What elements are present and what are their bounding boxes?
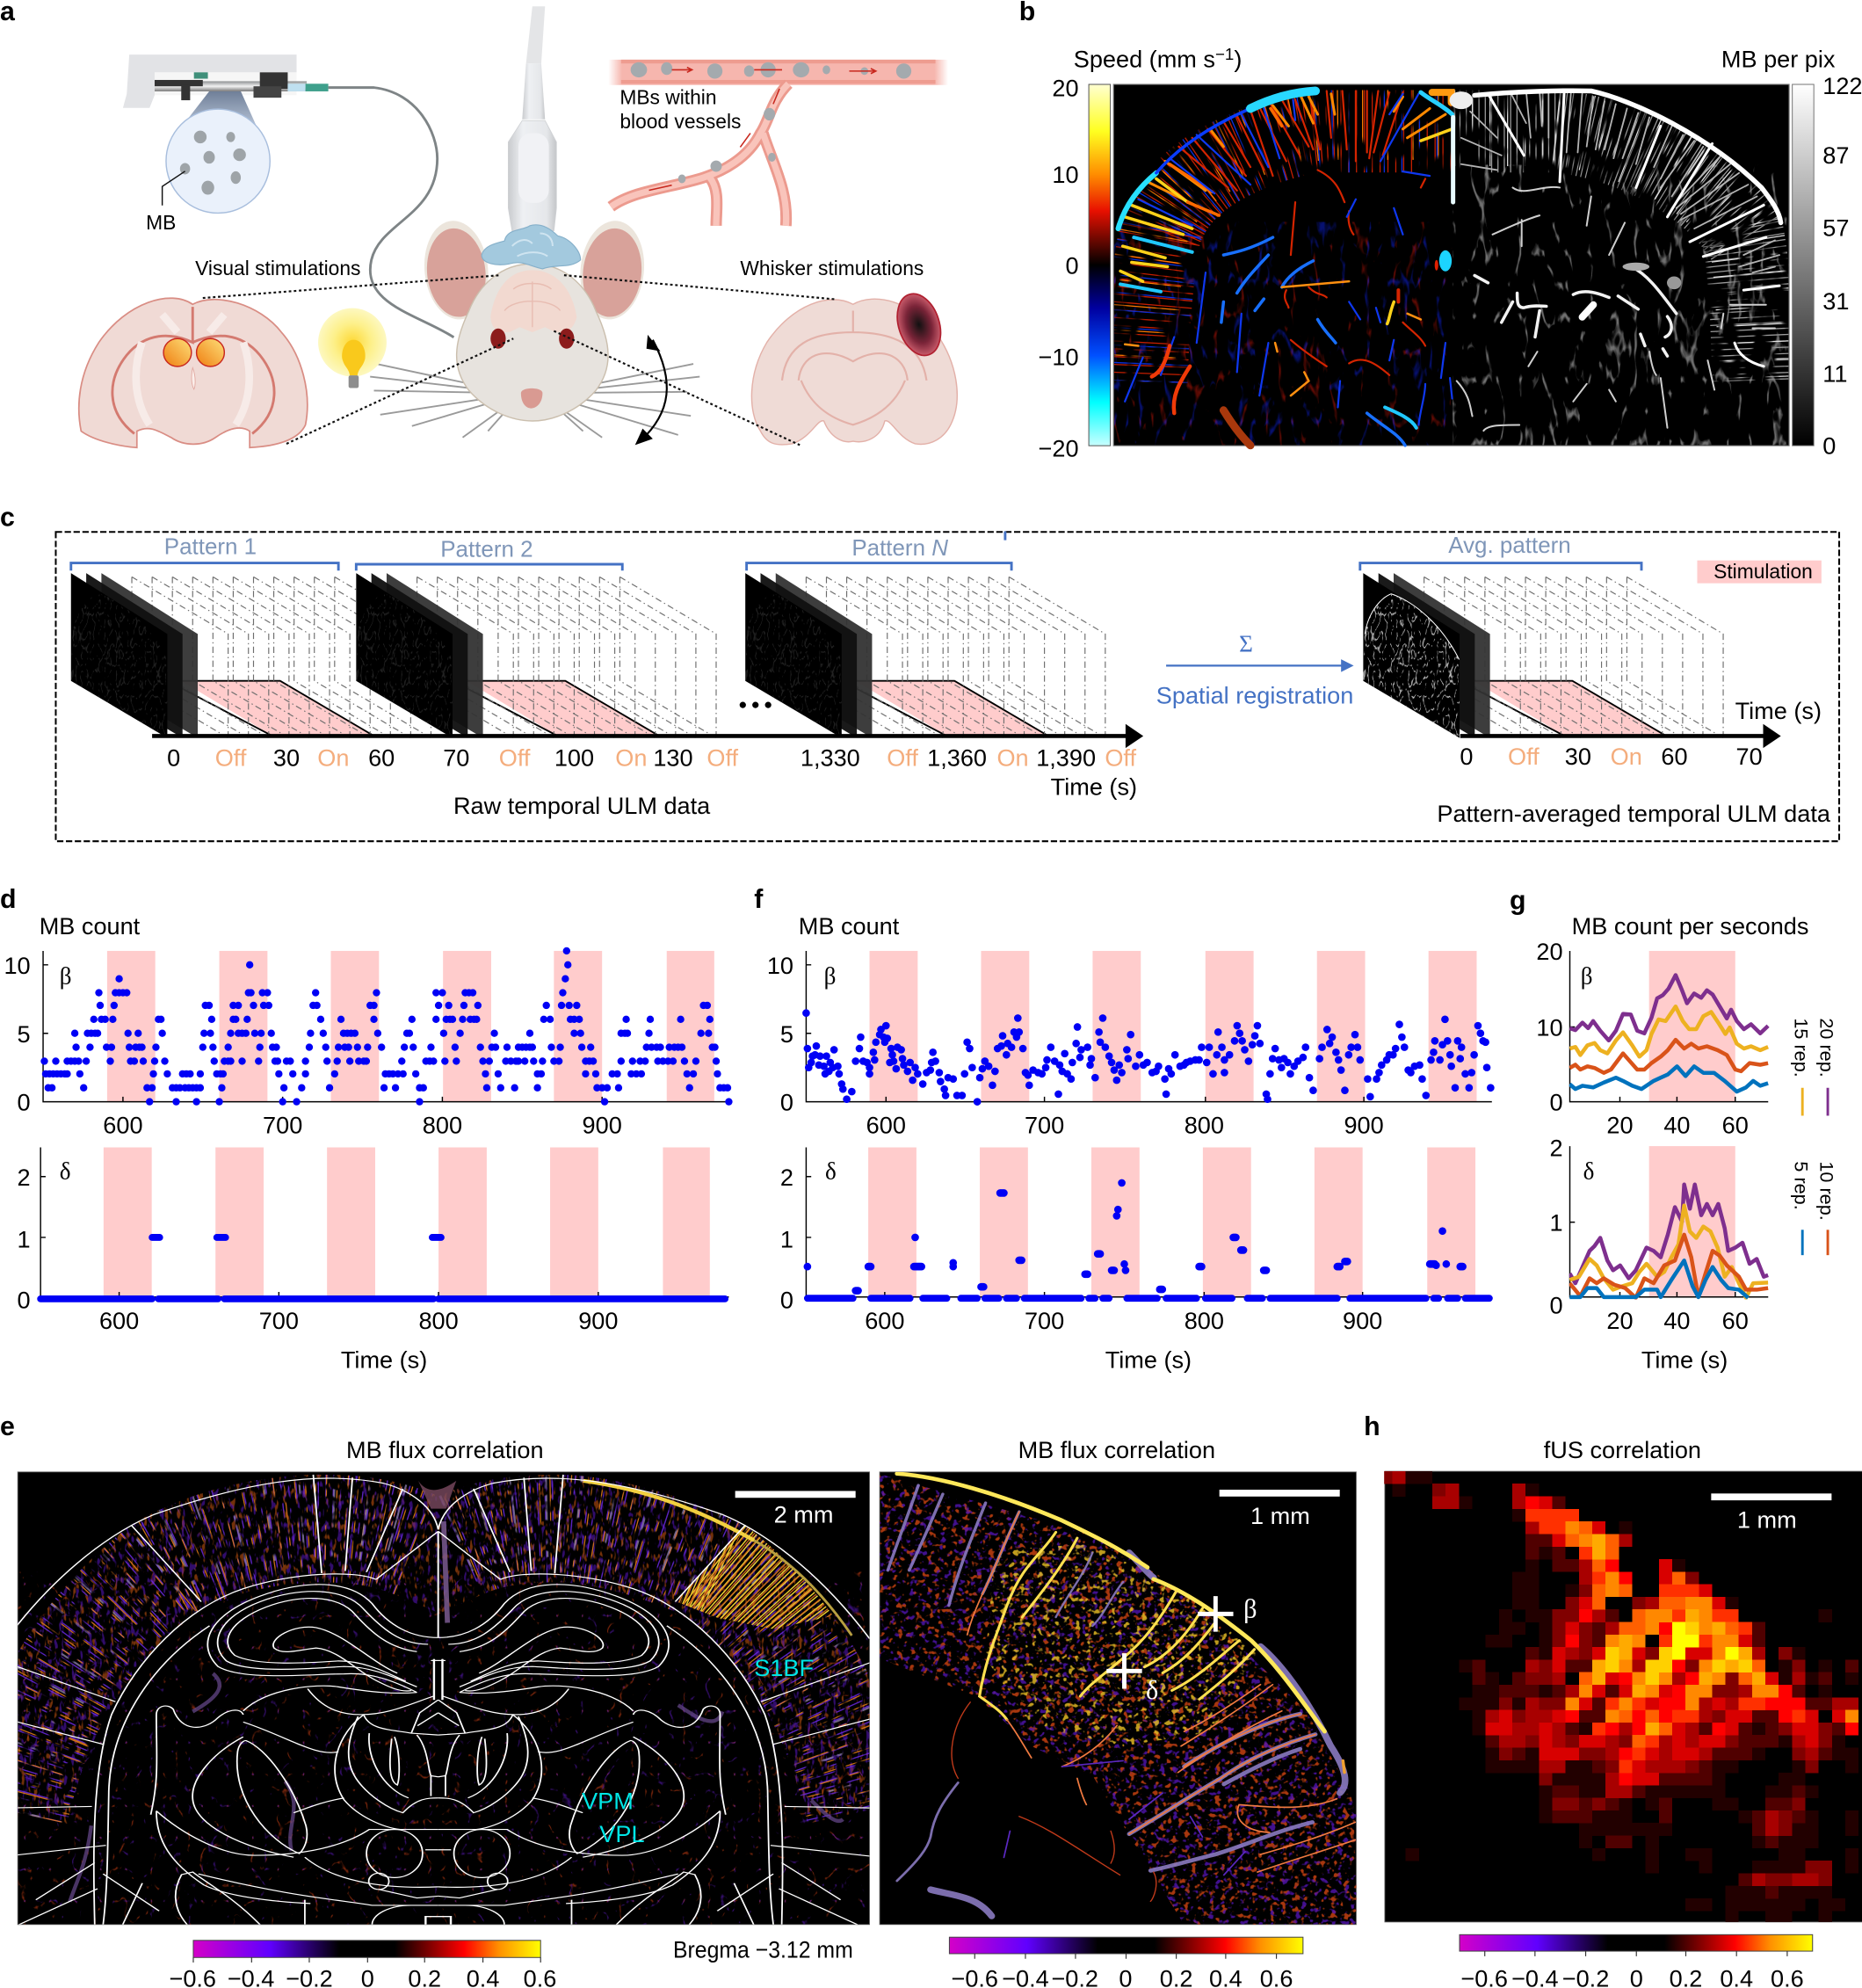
whole-brain correlation map with atlas [0, 1472, 913, 1925]
panel b: velocity and density map [1019, 0, 1862, 461]
legend: stimulation: Stimulation [1713, 560, 1813, 583]
left half: dense cortical fibres [1114, 90, 1452, 383]
pattern labels: Pattern N [851, 534, 948, 561]
plot delta: δ [60, 1158, 71, 1185]
panel letter c: c [0, 504, 15, 533]
raw axis labels: Off [887, 744, 918, 771]
plot beta: 40 [1663, 1112, 1690, 1139]
plot beta [4, 951, 728, 1139]
left: deep red and orange vessels [1152, 345, 1190, 413]
title: fUS correlation [1544, 1436, 1701, 1463]
raw axis labels: On [317, 744, 349, 771]
sum arrow [1156, 631, 1354, 709]
heading: MB count per seconds [1572, 912, 1808, 940]
plot delta: 900 [1343, 1307, 1382, 1334]
averaged axis labels: Off [1508, 743, 1540, 770]
plot beta: 900 [1344, 1112, 1384, 1139]
panel letter f: f [754, 885, 764, 914]
legend repetitions: 5 rep. [1791, 1161, 1813, 1210]
raw axis labels: 60 [368, 744, 395, 771]
plot delta: 2 [18, 1164, 31, 1191]
plot delta: 20 [1606, 1307, 1634, 1334]
panel letter g: g [1510, 886, 1525, 915]
plot beta: β [824, 962, 836, 989]
panel c: averaging workflow [0, 504, 1839, 841]
raw axis labels: Off [499, 744, 531, 771]
plot delta: 1 [780, 1225, 793, 1252]
plot beta: 0 [780, 1089, 793, 1116]
pattern labels [164, 532, 1571, 562]
legend repetitions: 15 rep. [1791, 1018, 1813, 1077]
speed colour bar: 20 [1052, 75, 1079, 102]
averaged axis labels: 60 [1661, 743, 1688, 770]
raw axis labels: Off [215, 744, 247, 771]
region labels: S1BF [754, 1654, 814, 1681]
purple-grey large vessels [888, 1485, 1345, 1916]
x axis label: Time (s) [1641, 1346, 1728, 1374]
left: red cortical fibres [1178, 91, 1425, 375]
legend repetitions: 20 rep. [1815, 1018, 1837, 1077]
region labels: VPM [582, 1788, 634, 1815]
bright radial vessels [980, 1532, 1255, 1720]
blood vessels with microbubbles: blood vessels [619, 110, 741, 133]
plot beta: 800 [1185, 1112, 1224, 1139]
caption raw: Raw temporal ULM data [453, 792, 711, 819]
pattern labels: Pattern 1 [164, 533, 257, 559]
x axis label: Time (s) [341, 1346, 427, 1374]
time axis average [1460, 724, 1781, 748]
left: blue fibres [1125, 94, 1453, 424]
averaged axis labels: On [1611, 743, 1642, 770]
raw axis labels: 1,390 [1036, 744, 1096, 771]
plot delta: 60 [1722, 1307, 1749, 1334]
scale bar 2 mm [735, 1491, 856, 1528]
left: orange and yellow fibres [1148, 94, 1445, 208]
plot delta: 0 [18, 1287, 31, 1314]
magnified syringe with microbubbles: MB [146, 211, 176, 234]
scale bar 1 mm [1220, 1490, 1340, 1529]
colour bar left [169, 1941, 556, 1988]
pattern 1 frame stack [71, 573, 431, 742]
averaged axis labels: 30 [1565, 743, 1591, 770]
plot delta: 600 [99, 1307, 139, 1334]
plot delta: 1 [18, 1225, 31, 1252]
dotted guide lines [203, 275, 836, 445]
ultrasound probe [508, 6, 556, 231]
region labels: VPL [599, 1820, 645, 1847]
plot delta: 900 [578, 1307, 618, 1334]
brain vessel image [1105, 84, 1795, 446]
right brain section: whisker stimulation [751, 288, 957, 445]
plot beta: 10 [4, 952, 31, 979]
plot delta: δ [825, 1158, 837, 1185]
blood vessels with microbubbles [608, 60, 948, 226]
syringe pump [123, 54, 329, 108]
density colour bar: 31 [1822, 287, 1849, 315]
raw axis labels: 0 [167, 744, 180, 771]
raw axis labels: On [996, 744, 1029, 771]
label visual stimulations: Visual stimulations [195, 257, 360, 279]
speed heading: Speed (mm s [1074, 46, 1215, 73]
label whisker stimulations: Whisker stimulations [740, 257, 924, 279]
plot delta: δ [1583, 1158, 1594, 1185]
cable from pump to mouse [329, 88, 453, 337]
panel h: fUS correlation [1364, 1412, 1862, 1988]
pattern labels: Avg. pattern [1448, 532, 1571, 558]
plot delta: 700 [259, 1307, 299, 1334]
speed heading: −1 [1215, 45, 1234, 63]
plot beta: 20 [1606, 1112, 1634, 1139]
region labels [582, 1654, 814, 1847]
panel a: experimental setup illustration [0, 0, 957, 447]
averaged axis labels [1460, 697, 1822, 770]
magnified syringe with microbubbles [146, 91, 270, 234]
speed colour bar [1039, 75, 1111, 461]
averaged axis labels: Time (s) [1735, 697, 1822, 724]
raw axis labels: 100 [554, 744, 594, 771]
mouse head with whiskers [370, 218, 699, 438]
plot beta: 700 [263, 1112, 302, 1139]
panel d: MB count traces [0, 885, 728, 1374]
raw axis labels: 130 [653, 744, 693, 771]
plot beta: 600 [866, 1112, 906, 1139]
speed colour bar: 10 [1052, 161, 1079, 188]
plot delta: 0 [1549, 1292, 1563, 1319]
plot beta: 10 [767, 952, 793, 979]
pattern N frame stack [745, 573, 1105, 742]
cross marker beta [1198, 1594, 1257, 1632]
plot beta: 0 [1549, 1089, 1563, 1116]
title middle: MB flux correlation [1018, 1436, 1215, 1463]
plot delta: 700 [1025, 1307, 1064, 1334]
plot beta: 700 [1025, 1112, 1064, 1139]
speed heading: ) [1234, 46, 1242, 73]
plot beta: 800 [423, 1112, 462, 1139]
plot beta: 900 [583, 1112, 622, 1139]
right: density fibres [1461, 91, 1779, 272]
raw axis labels: Off [1105, 744, 1136, 771]
plot beta: 60 [1722, 1112, 1749, 1139]
scale bar 1 mm: 1 mm [1737, 1506, 1797, 1533]
raw axis labels: On [615, 744, 647, 771]
panel g: repetition traces [1510, 886, 1837, 1374]
raw axis labels: 1,330 [801, 744, 860, 771]
scale bar 1 mm: 1 mm [1250, 1502, 1310, 1529]
MB per pixel heading: MB per pix [1721, 46, 1836, 73]
raw axis labels: Time (s) [1051, 773, 1137, 801]
cross marker beta: β [1243, 1594, 1257, 1624]
plot beta: β [1581, 962, 1593, 989]
heading: MB count [40, 912, 141, 940]
cross marker delta: δ [1146, 1675, 1158, 1705]
ellipsis [743, 703, 768, 707]
plot beta: 5 [780, 1020, 793, 1048]
plot delta [18, 1148, 728, 1334]
raw axis labels [167, 744, 1137, 801]
plot beta [767, 951, 1492, 1139]
raw axis labels: 30 [273, 744, 300, 771]
blood vessels with microbubbles: MBs within [619, 85, 717, 108]
dashed frame [55, 532, 1839, 841]
caption averaged: Pattern-averaged temporal ULM data [1437, 800, 1831, 827]
plot delta: 0 [780, 1287, 793, 1314]
averaged axis labels: 70 [1736, 743, 1763, 770]
raw axis labels: 70 [443, 744, 469, 771]
pattern 2 frame stack [356, 573, 716, 742]
pattern labels: Pattern 2 [440, 535, 533, 562]
density colour bar: 122 [1822, 72, 1862, 99]
brackets [71, 531, 1641, 570]
density colour bar: 0 [1822, 432, 1836, 460]
zoomed cortical correlation map [879, 1468, 1358, 1925]
density colour bar [1793, 72, 1862, 460]
surface vessel [897, 1474, 1324, 1731]
ultrasound gel [482, 225, 581, 269]
heading: MB count [799, 912, 900, 940]
plot delta [1549, 1135, 1768, 1334]
plot delta: 800 [1185, 1307, 1224, 1334]
raw axis labels: 1,360 [927, 744, 987, 771]
plot beta: 0 [18, 1089, 31, 1116]
speed colour bar: −10 [1039, 344, 1079, 371]
colour bar middle [949, 1937, 1303, 1988]
x axis label: Time (s) [1105, 1346, 1192, 1374]
plot beta: β [60, 962, 72, 989]
plot delta: 600 [865, 1307, 904, 1334]
right half: density background branches [1453, 165, 1788, 445]
sum arrow: Spatial registration [1156, 682, 1353, 709]
panel letter h: h [1364, 1412, 1380, 1441]
plot beta: 600 [103, 1112, 143, 1139]
left: surface vessels [1119, 173, 1156, 229]
scale bar 1 mm [1711, 1493, 1831, 1533]
colour bar right [1460, 1934, 1813, 1988]
plot delta: 800 [418, 1307, 459, 1334]
right half: dense cortical fibres [1453, 90, 1789, 381]
arrow: whisker deflection [635, 335, 667, 445]
light bulb [318, 308, 387, 388]
legend repetitions: 10 rep. [1815, 1161, 1837, 1221]
panel letter e: e [0, 1412, 15, 1441]
plot delta [780, 1148, 1492, 1334]
plot beta: 10 [1536, 1014, 1563, 1041]
plot delta: 2 [780, 1164, 793, 1191]
plot delta: 1 [1549, 1209, 1563, 1237]
title left: MB flux correlation [346, 1436, 544, 1463]
scale bar 2 mm: 2 mm [774, 1501, 833, 1528]
plot beta: 5 [18, 1020, 31, 1048]
panel e: correlation maps [0, 1412, 1358, 1988]
panel f: MB count traces [754, 885, 1492, 1374]
bregma label: Bregma −3.12 mm [673, 1935, 853, 1963]
sum arrow: Σ [1239, 631, 1253, 657]
density colour bar: 11 [1822, 359, 1847, 387]
plot beta: 20 [1536, 938, 1563, 965]
plot delta: 2 [1549, 1135, 1563, 1162]
cross marker delta [1106, 1653, 1158, 1705]
left half: velocity background branches [1114, 222, 1453, 445]
density colour bar: 57 [1822, 214, 1849, 241]
speed colour bar: −20 [1039, 434, 1079, 461]
left brain section: visual stimulation [79, 298, 308, 447]
average pattern frame stack [1363, 573, 1723, 742]
panel letter d: d [0, 885, 16, 914]
speed colour bar: 0 [1065, 252, 1079, 279]
time axis raw [152, 724, 1143, 748]
averaged axis labels: 0 [1460, 743, 1473, 770]
legend repetitions [1791, 1018, 1837, 1255]
raw axis labels: Off [706, 744, 739, 771]
fUS heat map [1379, 1471, 1862, 1930]
density colour bar: 87 [1822, 141, 1849, 169]
plot beta [1536, 938, 1768, 1139]
plot delta: 40 [1663, 1307, 1690, 1334]
